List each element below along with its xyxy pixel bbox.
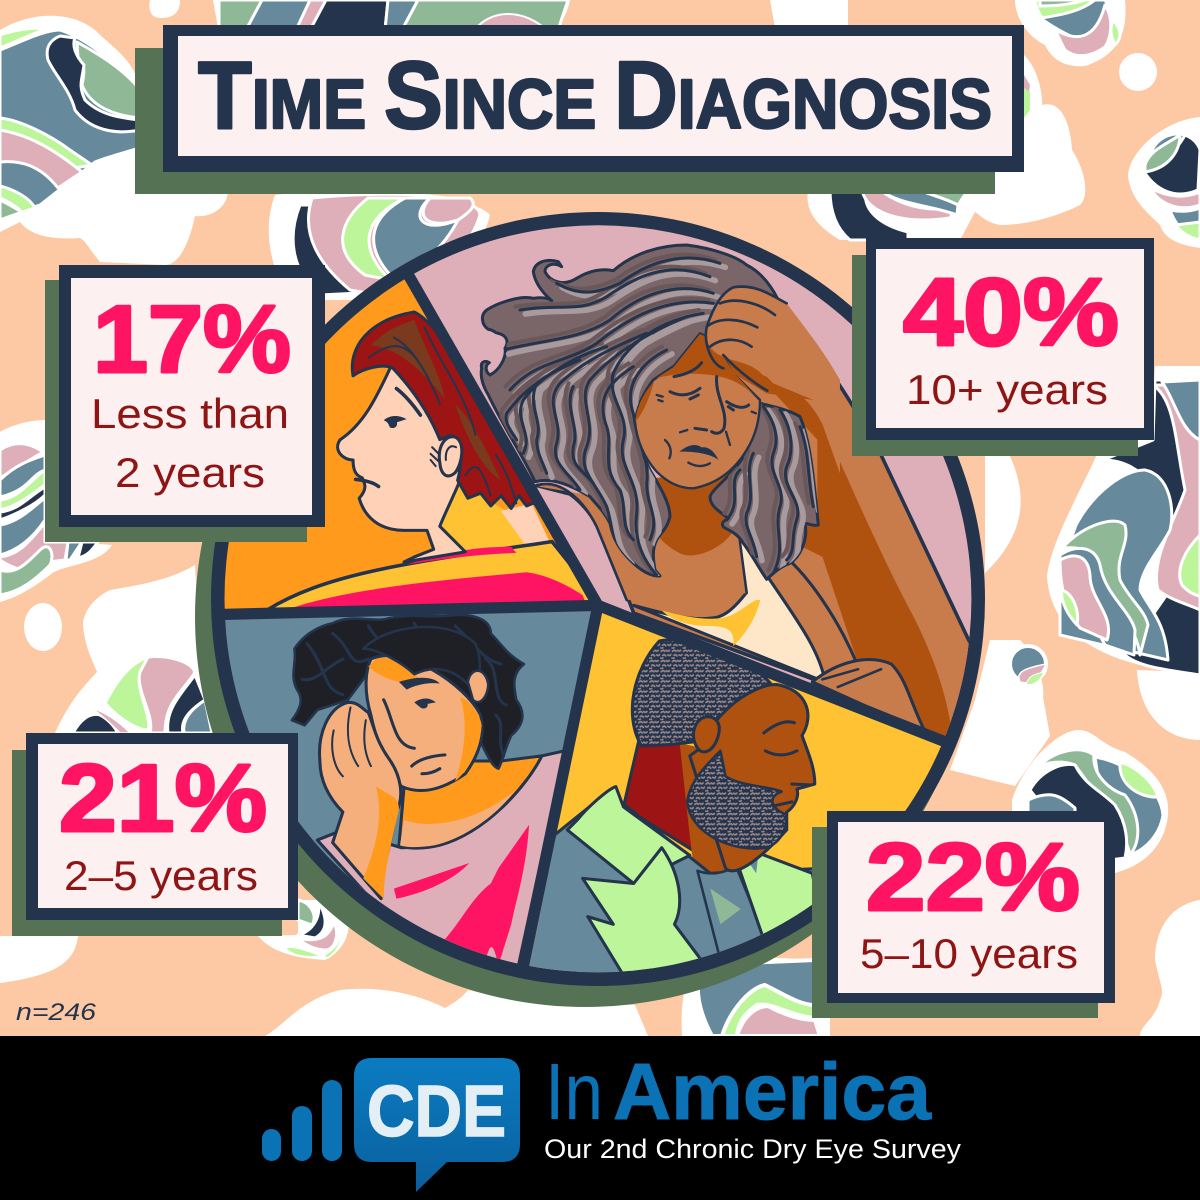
logo subtitle: Our 2nd Chronic Dry Eye Survey	[544, 1134, 962, 1164]
marble pattern: left side	[0, 444, 98, 595]
icon: speech bubble	[354, 1058, 520, 1192]
marble pattern: right side	[1060, 380, 1200, 675]
callout: 17% less than 2 years: Less than	[91, 390, 289, 437]
woman hand	[706, 287, 840, 473]
man beard	[687, 751, 787, 849]
man neck	[623, 740, 692, 852]
panel: 22% man, 5-10 years	[530, 613, 942, 972]
logo: CDE In America	[262, 1047, 962, 1192]
person ear	[468, 671, 488, 702]
sample size note: n=246	[16, 999, 97, 1026]
callout: 40% 10+ years: 10+ years	[906, 366, 1108, 413]
marble pattern: lower left	[73, 657, 212, 733]
footer bar	[0, 1036, 1200, 1200]
marble pattern: top left	[0, 28, 140, 220]
pie illustration	[211, 212, 985, 986]
woman resting hand	[812, 660, 924, 730]
man shirt body	[530, 802, 812, 972]
marble pattern: small dot right	[1010, 646, 1046, 684]
title text: TIME SINCE DIAGNOSIS	[198, 42, 992, 149]
callout: 40% 10+ years: 40%	[903, 259, 1119, 366]
panel: 21% person, 2-5 years	[225, 611, 591, 966]
profile hair	[352, 312, 537, 508]
panel: 40% woman, 10+ years	[410, 225, 972, 736]
marble pattern: behind pie top	[293, 194, 480, 298]
callout: 17% less than 2 years: 17%	[93, 286, 291, 393]
person hand	[320, 702, 401, 899]
callout: 22% 5-10 years: 5–10 years	[860, 930, 1078, 977]
woman tank top	[634, 531, 825, 682]
callout: 40% 10+ years	[852, 238, 1154, 456]
marble pattern: small below 21% box	[285, 900, 342, 958]
marble pattern: right edge	[1143, 134, 1200, 240]
callout: 21% 2-5 years: 21%	[59, 745, 267, 852]
profile shirt	[266, 542, 598, 613]
man hair	[632, 640, 771, 746]
callout: 22% 5-10 years	[812, 811, 1115, 1018]
marble pattern: top centre	[219, 0, 568, 30]
man ear	[693, 717, 719, 752]
person fringe and brows	[363, 627, 480, 688]
icon: signal bars	[262, 1080, 342, 1161]
woman arm and shoulder	[535, 358, 970, 736]
callout: 17% less than 2 years	[45, 265, 325, 542]
callout: 17% less than 2 years: 2 years	[115, 449, 265, 496]
title banner	[135, 25, 1024, 194]
callout: 22% 5-10 years: 22%	[866, 824, 1080, 931]
callout: 21% 2-5 years: 2–5 years	[64, 852, 258, 899]
marble pattern: top right	[1035, 0, 1120, 56]
man green shirt	[567, 787, 690, 883]
person shirt	[317, 751, 565, 975]
profile ear	[439, 437, 462, 476]
pie shadow	[195, 227, 975, 1007]
panel: 17% profile, less than 2 years	[224, 276, 588, 609]
woman face	[635, 333, 760, 488]
logo lettering CDE: CDE	[367, 1072, 506, 1152]
person neck	[399, 756, 542, 848]
marble pattern: lower right	[1012, 730, 1168, 880]
logo lettering In: In	[545, 1047, 603, 1136]
profile face	[338, 366, 470, 562]
woman grey hair	[481, 245, 818, 579]
person hair	[292, 615, 524, 769]
callout: 21% 2-5 years	[12, 733, 298, 936]
marble pattern: bottom centre	[698, 960, 820, 1036]
profile shaded neck area	[442, 486, 524, 550]
pie dividers	[215, 276, 955, 975]
woman face, neck and hair detail	[481, 245, 840, 600]
man face	[690, 684, 815, 871]
logo lettering America: America	[613, 1047, 932, 1136]
marble pattern: under title right	[830, 75, 1030, 240]
person face	[366, 656, 482, 791]
woman hair strands	[499, 255, 819, 579]
